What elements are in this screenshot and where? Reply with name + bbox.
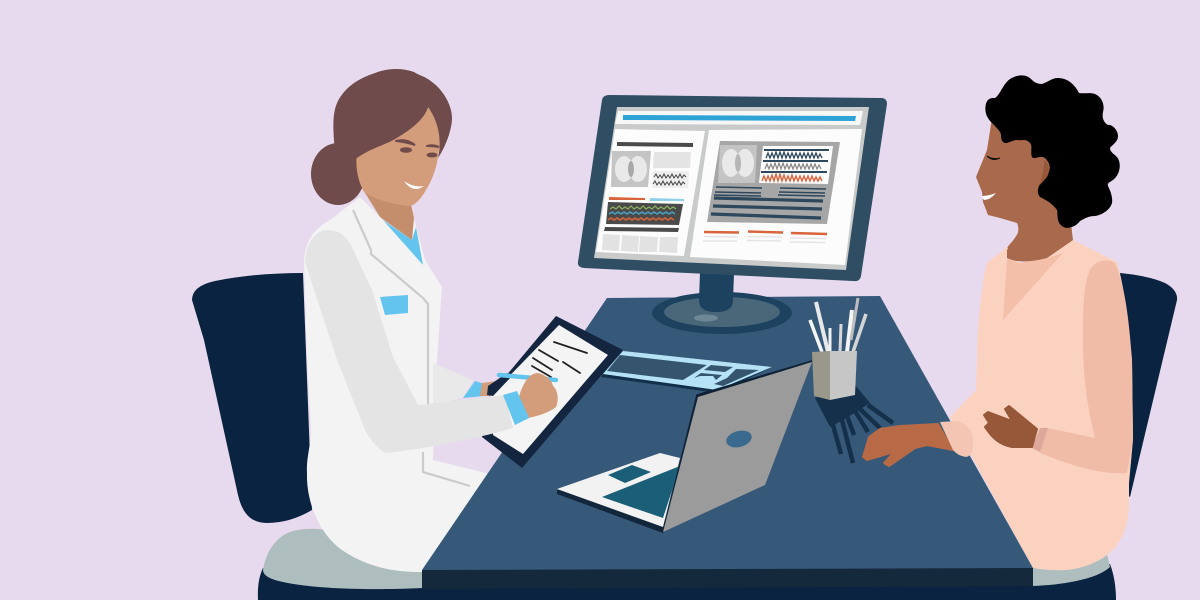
table front edge [422, 568, 1033, 589]
patient seat cushion [1030, 554, 1110, 586]
hair bun [311, 143, 365, 205]
laptop [557, 361, 812, 533]
lab coat body [304, 197, 490, 572]
wrist band [1032, 428, 1048, 452]
blue label bar [650, 198, 684, 201]
monitor [578, 95, 887, 334]
pencils [810, 298, 866, 352]
base inner [664, 297, 780, 327]
right report box [707, 141, 840, 224]
far arm cuff [463, 381, 488, 398]
stand [699, 272, 734, 312]
cup left face [812, 351, 830, 400]
far hand [480, 381, 497, 396]
orange label bar [609, 197, 645, 200]
skin: face and neck [976, 118, 1073, 261]
right waveform panel [759, 146, 833, 184]
lid [663, 362, 812, 532]
lid dark edge [663, 361, 812, 532]
coat lapel line [353, 210, 470, 486]
left panel [596, 129, 705, 256]
clipboard [482, 316, 623, 468]
trackpad [608, 465, 651, 483]
eyebrows [396, 140, 439, 147]
paper [490, 325, 608, 454]
hair [333, 69, 452, 160]
clipboard edge strip [487, 373, 512, 396]
base highlight [694, 314, 718, 322]
neck [362, 188, 416, 240]
hand [863, 424, 953, 466]
doctor figure [304, 69, 497, 572]
left waveform box [652, 171, 689, 188]
right brain [722, 149, 754, 177]
cup right face [830, 351, 857, 400]
doctor seat cushion [263, 529, 425, 589]
neck redraw [1007, 228, 1073, 262]
blouse body [950, 240, 1133, 570]
far arm sleeve [433, 363, 473, 405]
keyboard [601, 351, 772, 393]
hair [985, 75, 1120, 228]
right scan [718, 145, 757, 183]
doctor writing arm [305, 230, 558, 453]
left panel heading bar [617, 142, 693, 147]
patient figure [950, 75, 1133, 570]
blue title bar [623, 115, 856, 121]
ear [1040, 160, 1049, 185]
smile [981, 193, 996, 200]
chair base [258, 564, 1116, 600]
bezel [578, 95, 887, 281]
doctor chair back [192, 273, 312, 523]
blouse sleeve [1040, 260, 1133, 473]
right panel [690, 129, 862, 265]
pen cup with pencils [810, 298, 866, 400]
pen [499, 375, 556, 380]
hand [518, 373, 558, 418]
screen [594, 107, 869, 270]
name badge [380, 295, 408, 315]
sleeve [305, 230, 513, 453]
monitor base [652, 292, 792, 334]
deck keys [602, 466, 680, 518]
wrist cuff [503, 391, 529, 425]
top bar [615, 111, 863, 125]
left brain [615, 156, 647, 182]
paper text lines [532, 342, 587, 377]
left dark bar [604, 227, 679, 232]
base shadow [557, 453, 666, 533]
left thumbnails [602, 234, 678, 253]
scrub neckline [383, 220, 423, 265]
keyboard deck [557, 453, 680, 527]
eyes [400, 147, 412, 153]
dark waveform chart [606, 202, 683, 225]
eye [987, 156, 1000, 160]
blouse neckline shade [1003, 253, 1063, 320]
patient chair back [1110, 273, 1177, 497]
face [356, 107, 440, 206]
left light box [653, 152, 691, 168]
lid logo [724, 428, 754, 450]
orange summary columns [703, 232, 827, 242]
table top [422, 296, 1033, 571]
near hand [984, 406, 1037, 447]
left scan [611, 151, 651, 187]
smile [404, 181, 424, 189]
report text lines [711, 187, 826, 218]
pen cup shadow [815, 385, 893, 463]
sleeve cuff [940, 421, 973, 457]
patient front arm [863, 421, 973, 466]
